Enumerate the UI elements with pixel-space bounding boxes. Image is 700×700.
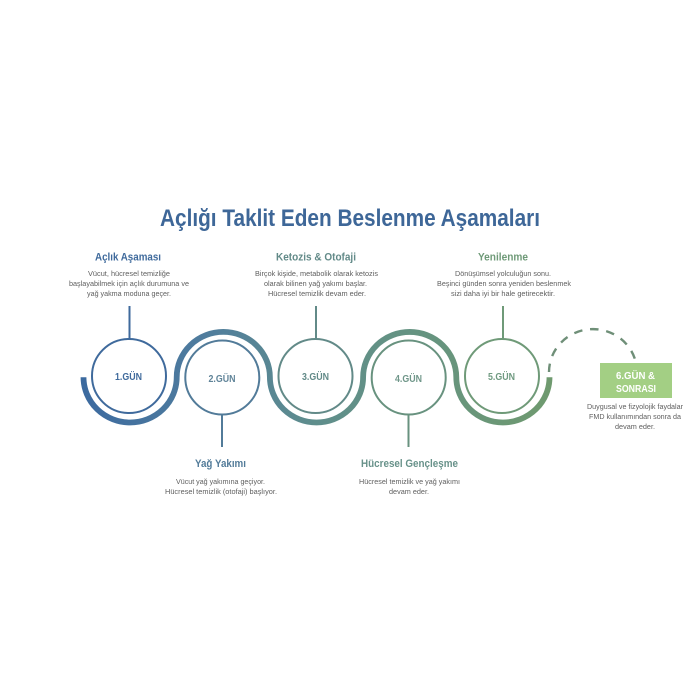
stage 5 heading: Yenilenme: [478, 252, 528, 264]
stage 1 connector: [128, 306, 130, 339]
stage 6 text: FMD kullanımından sonra da: [589, 412, 682, 421]
stage 5 text: sizi daha iyi bir hale getirecektir.: [451, 289, 555, 298]
stage 3 text: [255, 269, 378, 298]
stage 6 text: devam eder.: [615, 422, 655, 431]
day 2 circle: 2.GÜN: [208, 372, 236, 385]
stage 5 text: Beşinci günden sonra yeniden beslenmek: [437, 279, 571, 288]
stage 3 text: Hücresel temizlik devam eder.: [268, 289, 366, 298]
stage 1 heading: Açlık Aşaması: [95, 252, 161, 264]
stage 5 text: Dönüşümsel yolculuğun sonu.: [455, 269, 551, 278]
day 6 box: 6.GÜN &: [616, 369, 655, 382]
stage 2 heading: Yağ Yakımı: [195, 458, 246, 470]
day 3 circle: 3.GÜN: [302, 370, 329, 383]
stage 1: [69, 252, 189, 413]
stage 2 text: Vücut yağ yakımına geçiyor.: [176, 477, 265, 486]
wave ribbon: [84, 332, 550, 423]
stage 4 connector: [408, 415, 410, 447]
stage 5 text: [437, 269, 571, 298]
stage 3: [255, 252, 378, 413]
stage 5 connector: [502, 306, 504, 339]
day 4 circle: [372, 340, 446, 414]
day 2 circle: [185, 340, 259, 414]
stage 1 text: başlayabilmek için açlık durumuna ve: [69, 279, 189, 288]
stage 4 text: Hücresel temizlik ve yağ yakımı: [359, 477, 460, 486]
day 1 circle: [92, 339, 166, 413]
stage 4 heading: Hücresel Gençleşme: [361, 458, 458, 470]
stage 5: [437, 252, 571, 413]
stage 2 connector: [221, 415, 223, 447]
day 5 circle: [465, 339, 539, 413]
day 1 circle: 1.GÜN: [115, 370, 142, 383]
stage 1 text: Vücut, hücresel temizliğe: [88, 269, 170, 278]
day 5 circle: 5.GÜN: [488, 370, 515, 383]
stage 4 text: [359, 477, 460, 496]
stage 1 text: [69, 269, 189, 298]
day 6 box: SONRASI: [616, 383, 656, 395]
stage 3 heading: Ketozis & Otofaji: [276, 252, 356, 264]
day 4 circle: 4.GÜN: [395, 372, 422, 385]
dashed arc to day 6: [549, 329, 636, 372]
stage 3 text: olarak bilinen yağ yakımı başlar.: [264, 279, 367, 288]
stage 2: [165, 340, 277, 496]
stage 4 text: devam eder.: [389, 487, 429, 496]
stage 3 text: Birçok kişide, metabolik olarak ketozis: [255, 269, 378, 278]
stage 6 text: [587, 402, 683, 431]
day 3 circle: [278, 339, 352, 413]
day 6 box: [600, 363, 672, 398]
stage 6 text: Duygusal ve fizyolojik faydalar: [587, 402, 683, 411]
stage 3 connector: [315, 306, 317, 339]
stage 1 text: yağ yakma moduna geçer.: [87, 289, 171, 298]
stage 6: [587, 363, 683, 431]
stage 2 text: [165, 477, 277, 496]
stage 2 text: Hücresel temizlik (otofaji) başlıyor.: [165, 487, 277, 496]
title: Açlığı Taklit Eden Beslenme Aşamaları: [160, 205, 540, 232]
stage 4: [359, 340, 460, 496]
